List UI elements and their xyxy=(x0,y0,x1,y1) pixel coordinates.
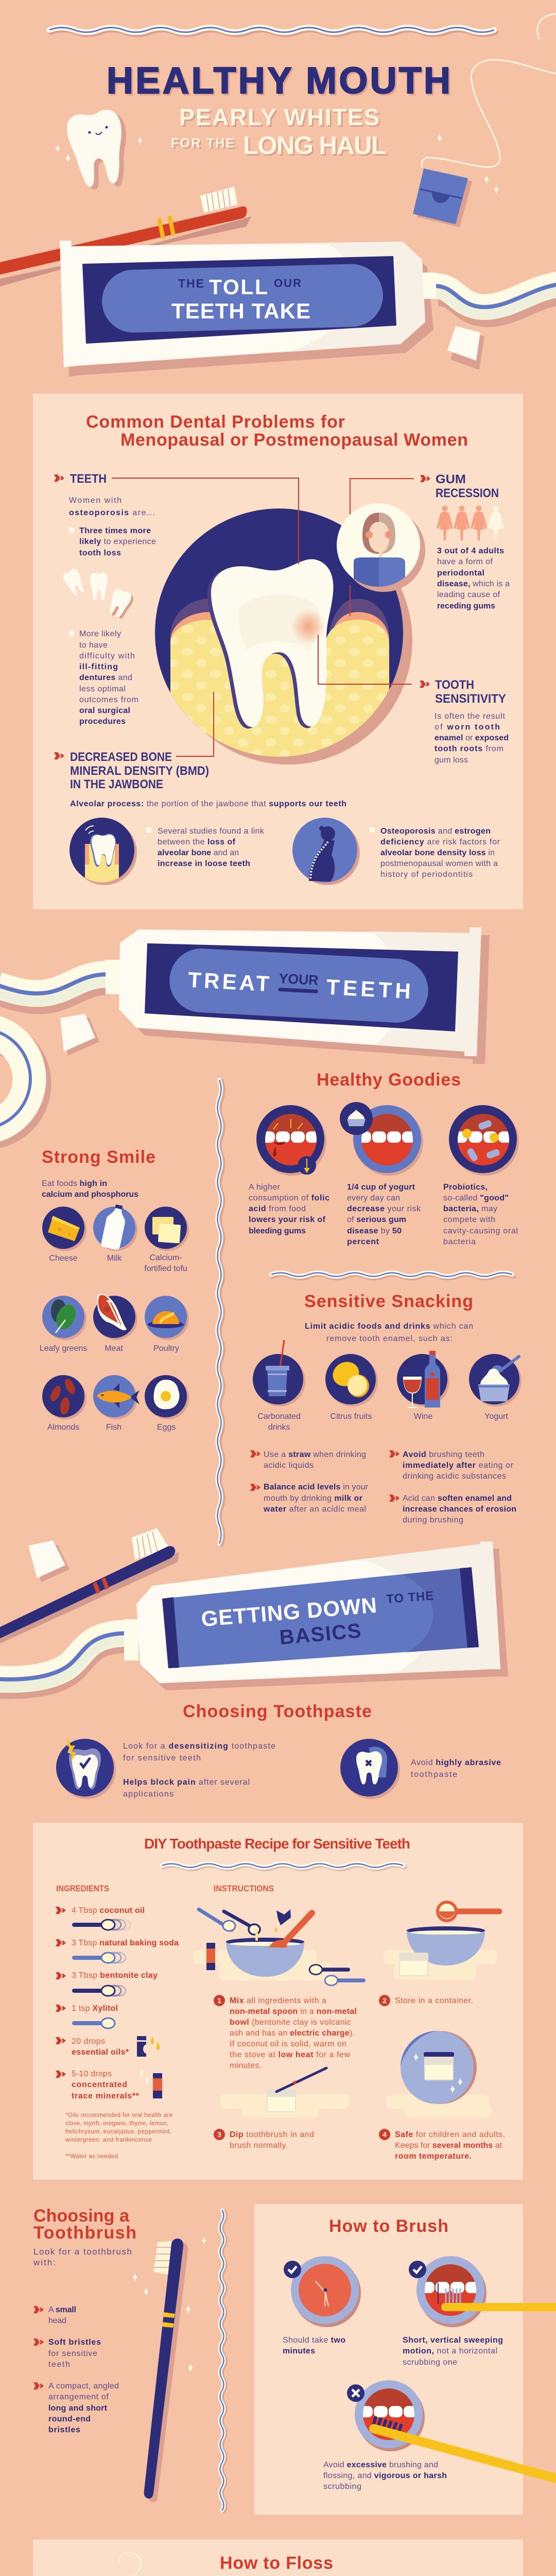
banner text: TEETH xyxy=(326,975,411,1003)
callout: tooth sensitivity: SENSITIVITY xyxy=(435,692,506,706)
text: osteoporosis risk xyxy=(370,827,500,879)
footnotes: clove, myrrh, oregano, thyme, lemon, xyxy=(65,2121,168,2127)
paste strip: toothpaste 2 xyxy=(0,974,110,1001)
footnotes: *Oils recommended for oral health are xyxy=(65,2112,172,2119)
ingredient: xylitol: 1 tsp Xylitol xyxy=(72,2004,118,2013)
sparkles xyxy=(132,2236,206,2372)
text: gum disease stat: leading cause of xyxy=(437,590,500,599)
text: alveolar bone link: increase in loose teeth xyxy=(158,859,250,868)
heading xyxy=(86,412,468,450)
text: yogurt: decrease your risk xyxy=(347,1205,421,1213)
sparkles xyxy=(55,133,499,194)
text: two minutes: minutes xyxy=(283,2347,315,2355)
text: osteoporosis risk: history of periodontitis xyxy=(380,870,473,879)
bullet: acid softens enamel: increase chances of erosion xyxy=(403,1505,516,1514)
text: probiotics: cavity-causing oral xyxy=(443,1227,518,1235)
callout: decreased bone mineral density: DECREASED BONE xyxy=(70,750,172,764)
step 2: 2 xyxy=(383,1996,387,2005)
ingredient: trace minerals: trace minerals** xyxy=(72,2092,140,2100)
bullet: acid softens enamel: Acid can soften enamel and xyxy=(403,1494,512,1503)
text: desensitizing: for sensitive teeth xyxy=(123,1754,201,1762)
heading: Menopausal or Postmenopausal Women xyxy=(120,430,468,450)
intro text: Eat foods high in xyxy=(42,1179,107,1188)
bullet: more likely: ill-fitting xyxy=(79,663,118,671)
callout: decreased bone mineral density: MINERAL DENSITY (BMD) xyxy=(70,764,209,778)
ingredient: essential oils xyxy=(56,2036,160,2057)
icon: smiling tooth xyxy=(65,108,133,192)
snack labels xyxy=(257,1412,508,1432)
title: HEALTHY MOUTH xyxy=(107,60,450,101)
text: osteoporosis risk: Osteoporosis and estrogen xyxy=(380,827,491,836)
step 1: the stove at low heat for a few xyxy=(230,2050,350,2059)
bullet: compact arrangement: round-end xyxy=(48,2415,91,2424)
title: LONG HAUL xyxy=(243,132,387,160)
text: abrasive: toothpaste xyxy=(411,1770,457,1779)
text: desensitizing: Look for a desensitizing toothpaste xyxy=(123,1742,275,1751)
text: avoid excessive: scrubbing xyxy=(323,2482,361,2491)
bullet: small head: A small xyxy=(48,2306,76,2314)
text: two minutes: Should take two xyxy=(283,2336,345,2345)
food labels row 1: Calcium- xyxy=(149,1253,182,1262)
text: avoid excessive xyxy=(323,2461,447,2491)
icon: toothpaste cap xyxy=(447,326,484,370)
ingredient: bentonite clay: 3 Tbsp bentonite clay xyxy=(72,1971,158,1980)
icon: paste ring xyxy=(0,1029,34,1133)
panel: how to floss xyxy=(33,2539,523,2576)
step 1: 1 xyxy=(217,1996,221,2005)
food labels row 2: Leafy greens xyxy=(40,1344,87,1353)
icon: milk xyxy=(93,1203,137,1251)
snack labels: drinks xyxy=(268,1423,290,1432)
callout: teeth: TEETH xyxy=(70,472,107,486)
text: osteoporosis risk: deficiency are risk factors for xyxy=(380,838,500,846)
text: vertical sweeping xyxy=(403,2336,503,2367)
callout: gum recession xyxy=(350,472,499,616)
food labels row 2: Poultry xyxy=(153,1344,179,1353)
text: abrasive xyxy=(411,1758,501,1779)
bullet: balance acid: mouth by drinking milk or xyxy=(264,1494,362,1503)
text: gum disease stat: 3 out of 4 adults xyxy=(437,547,504,555)
text: alveolar bone link xyxy=(146,827,265,868)
step 3: 3 xyxy=(217,2130,221,2139)
text: osteoporosis risk: postmenopausal women with a xyxy=(380,859,498,868)
food labels row 1 xyxy=(49,1253,187,1273)
bullet: soft bristles xyxy=(33,2338,101,2369)
paste strip: toothpaste 1 xyxy=(435,284,556,314)
intro text: Limit acidic foods and drinks which can xyxy=(305,1322,473,1331)
instructions heading: INSTRUCTIONS xyxy=(214,1884,274,1893)
step 3 xyxy=(214,2129,314,2150)
ingredient: baking soda: 3 Tbsp natural baking soda xyxy=(72,1939,179,1947)
footnotes: wintergreen, and frankincense xyxy=(65,2137,152,2143)
intro text: calcium and phosphorus xyxy=(42,1190,138,1199)
icon: floss thread and box xyxy=(413,14,556,227)
bullet: soft bristles: Soft bristles xyxy=(48,2338,101,2347)
text: probiotics xyxy=(443,1183,518,1246)
step 4 xyxy=(379,2129,505,2161)
intro text: with: xyxy=(33,2258,56,2267)
illustration: mixing bowl xyxy=(193,1909,366,1986)
icon: carbonated drink xyxy=(253,1340,305,1406)
heading: Healthy Goodies xyxy=(317,1070,461,1090)
food labels row 3: Eggs xyxy=(157,1423,176,1432)
step 1: ash and has an electric charge). xyxy=(230,2029,355,2038)
text: avoid excessive: Avoid excessive brushing and xyxy=(323,2461,438,2469)
ingredient: trace minerals: concentrated xyxy=(72,2080,127,2089)
banner text: GETTING DOWN xyxy=(200,1593,378,1631)
floss wave divider xyxy=(162,1864,405,1869)
icon: spine circle xyxy=(292,818,360,885)
heading: Common Dental Problems for xyxy=(86,412,345,432)
callout: tooth sensitivity: gum loss xyxy=(435,756,468,765)
callout: teeth xyxy=(54,472,299,564)
title: PEARLY WHITES xyxy=(179,104,379,130)
ingredients list xyxy=(56,1884,179,2160)
text: gum disease stat: periodontal xyxy=(437,569,484,578)
text: probiotics: compete with xyxy=(443,1215,495,1224)
bullet: compact arrangement xyxy=(33,2382,119,2434)
ingredient: trace minerals xyxy=(56,2069,162,2100)
icon: three small teeth xyxy=(61,567,135,621)
bullet: small head xyxy=(33,2306,76,2325)
panel: how to brush xyxy=(254,2204,556,2515)
bullet: avoid brushing: Avoid brushing teeth xyxy=(403,1450,484,1459)
food labels row 2 xyxy=(40,1344,179,1353)
bullet: avoid brushing: drinking acidic substances xyxy=(403,1472,506,1481)
illustration: jar in circle xyxy=(386,2031,492,2117)
text: avoid excessive: flossing, and vigorous or harsh xyxy=(323,2471,447,2480)
floss divider xyxy=(220,2210,225,2512)
heading xyxy=(33,2206,136,2243)
step 4: Keeps for several months at xyxy=(395,2141,502,2150)
panel: DIY toothpaste recipe xyxy=(33,1823,523,2180)
food labels row 2: Meat xyxy=(105,1344,123,1353)
floss divider xyxy=(217,1080,223,1545)
callout: tooth sensitivity: enamel or exposed xyxy=(435,734,509,742)
text: probiotics: Probiotics, xyxy=(443,1183,488,1192)
title: FOR THE xyxy=(171,136,234,150)
paste strip: toothpaste 3 xyxy=(0,1633,128,1686)
step 2 xyxy=(379,1995,473,2006)
bullet: balance acid: water after an acidic meal xyxy=(263,1505,366,1514)
section: choosing a toothbrush xyxy=(33,2206,206,2502)
icon: loose tooth circle xyxy=(70,818,137,885)
icon: yogurt xyxy=(469,1354,522,1406)
bullet: compact arrangement: long and short xyxy=(48,2404,108,2413)
banner text: BASICS xyxy=(279,1619,362,1649)
food labels row 3 xyxy=(47,1423,176,1432)
bullet: small head: head xyxy=(48,2316,66,2325)
text: folic acid: consumption of folic xyxy=(249,1194,329,1202)
bullet: three times more likely: tooth loss xyxy=(79,549,121,557)
ingredient: essential oils: essential oils* xyxy=(72,2048,129,2057)
icon: meat xyxy=(93,1294,137,1340)
icon: proper brushing xyxy=(409,2256,556,2327)
text: probiotics: bacteria xyxy=(443,1238,476,1246)
floss wave divider xyxy=(271,1273,513,1278)
ingredient: bentonite clay xyxy=(56,1971,158,1996)
banner text xyxy=(187,966,411,1003)
step 1 xyxy=(214,1995,357,2070)
heading: DIY Toothpaste Recipe for Sensitive Teeth xyxy=(144,1836,410,1852)
text: gum disease stat: have a form of xyxy=(437,557,493,566)
bullet: three times more likely xyxy=(69,527,156,557)
text: yogurt: 1/4 cup of yogurt xyxy=(347,1183,415,1192)
text: desensitizing: Helps block pain after several xyxy=(123,1778,250,1787)
step 1: bowl (bentonite clay is volcanic xyxy=(230,2018,351,2027)
bullet: more likely: oral surgical xyxy=(79,706,130,715)
bullet: more likely: outcomes from xyxy=(79,696,138,704)
section: strong smile xyxy=(40,1147,189,1432)
step 1: minutes. xyxy=(230,2061,262,2070)
icon: woman portrait xyxy=(337,503,425,592)
icon: red toothbrush xyxy=(0,187,251,286)
bullet: more likely: to have xyxy=(79,641,108,650)
banner text: OUR xyxy=(274,277,301,290)
step 1: non-metal spoon in a non-metal xyxy=(230,2007,357,2016)
ingredient: baking soda xyxy=(56,1939,179,1963)
text: desensitizing: applications xyxy=(123,1790,173,1799)
text: yogurt: percent xyxy=(347,1238,379,1246)
icon: tofu xyxy=(145,1207,189,1251)
bullet: more likely: dentures and xyxy=(79,673,132,682)
callout: tooth sensitivity: of worn tooth xyxy=(435,723,500,732)
text: yogurt: disease by 50 xyxy=(347,1227,402,1235)
intro text: Look for a toothbrush xyxy=(33,2247,132,2257)
step 2: Store in a container. xyxy=(395,1996,473,2005)
text: folic acid: bleeding gums xyxy=(249,1227,306,1235)
panel: toothpaste tube banner Getting Down to the Basics xyxy=(124,1541,508,1690)
ingredients list: INGREDIENTS xyxy=(56,1884,109,1893)
text: two minutes xyxy=(283,2336,345,2355)
intro text: remove tooth enamel, such as: xyxy=(326,1334,453,1343)
icon: floss box xyxy=(70,2553,141,2576)
food labels row 1: Milk xyxy=(107,1254,122,1263)
callout: decreased bone mineral density: IN THE JAWBONE xyxy=(70,777,163,791)
icon: citrus xyxy=(325,1354,378,1406)
bullet: straw: Use a straw when drinking xyxy=(264,1450,366,1459)
icon: navy toothbrush xyxy=(0,1528,179,1643)
food labels row 3: Fish xyxy=(106,1423,121,1432)
banner text: YOUR xyxy=(279,971,319,988)
bullet: avoid brushing xyxy=(389,1450,514,1481)
bullet: more likely: less optimal xyxy=(79,685,126,693)
icon: four women, three highlighted xyxy=(437,506,504,540)
text: probiotics: so-called "good" xyxy=(443,1194,509,1202)
callout: teeth: osteoporosis are... xyxy=(69,509,155,517)
callout: tooth sensitivity: tooth roots from xyxy=(435,744,503,753)
section: healthy goodies xyxy=(249,1070,519,1246)
intro text xyxy=(305,1322,473,1343)
icon: cheese xyxy=(42,1207,86,1251)
text: gum disease stat xyxy=(437,547,510,611)
icon: clock xyxy=(284,2256,361,2327)
icon: toothpaste cap xyxy=(28,1540,70,1582)
callout: tooth sensitivity xyxy=(318,635,509,765)
snack labels: Carbonated xyxy=(257,1412,301,1421)
bullet: straw xyxy=(250,1450,366,1470)
step 4: room temperature. xyxy=(395,2152,472,2161)
icon: abrasive tooth xyxy=(340,1739,400,1799)
ingredient: coconut oil xyxy=(56,1906,145,1930)
step 4: Safe for children and adults. xyxy=(395,2130,505,2139)
ingredient: essential oils: 20 drops xyxy=(72,2037,105,2046)
text: folic acid xyxy=(249,1183,329,1235)
step 3: brush normally. xyxy=(230,2141,288,2150)
panel: common dental problems xyxy=(33,394,523,909)
bullet: soft bristles: for sensitive xyxy=(48,2349,97,2358)
illustration: tooth and jawbone xyxy=(155,509,412,765)
text: yogurt: of serious gum xyxy=(347,1215,406,1224)
banner text: TO THE xyxy=(386,1589,434,1606)
icon: leafy greens xyxy=(42,1296,86,1340)
text: gum disease stat: receding gums xyxy=(437,602,495,611)
text: alveolar bone link: alveolar bone and an xyxy=(158,849,239,857)
callout: tooth sensitivity: TOOTH xyxy=(435,678,474,692)
heading: How to Brush xyxy=(329,2216,448,2236)
icon: desensitizing tooth xyxy=(56,1736,116,1799)
text: folic acid: A higher xyxy=(249,1183,281,1192)
icon: egg xyxy=(145,1375,189,1419)
title xyxy=(107,60,450,160)
snack labels: Wine xyxy=(414,1412,432,1421)
icon: toothpaste cap xyxy=(60,1014,99,1056)
banner text: TEETH TAKE xyxy=(171,299,310,323)
illustration: store in container xyxy=(384,1902,499,1980)
bullet: balance acid: Balance acid levels in your xyxy=(264,1483,369,1492)
heading: How to Floss xyxy=(220,2553,333,2573)
footnotes xyxy=(65,2112,172,2160)
snack labels: Citrus fruits xyxy=(331,1412,372,1421)
text: folic acid: lowers your risk of xyxy=(249,1215,326,1224)
banner text: THE xyxy=(178,277,204,290)
banner text: TOLL xyxy=(209,275,268,299)
bullet: soft bristles: teeth xyxy=(48,2360,70,2369)
callout: decreased bone mineral density xyxy=(54,692,346,808)
ingredient: coconut oil: 4 Tbsp coconut oil xyxy=(72,1906,145,1915)
icon: mouth with folic acid xyxy=(256,1105,326,1176)
text: desensitizing xyxy=(123,1742,275,1799)
icon: harsh brushing xyxy=(347,2380,556,2479)
banner text xyxy=(200,1589,434,1649)
bullet: three times more likely: likely to experience xyxy=(79,537,156,546)
text: probiotics: bacteria, may xyxy=(443,1205,497,1213)
text: vertical sweeping: scrubbing one xyxy=(403,2358,457,2367)
heading: Toothbrush xyxy=(33,2223,136,2243)
food labels row 1: Cheese xyxy=(49,1254,78,1263)
icon: wine xyxy=(397,1351,449,1408)
ingredient: trace minerals: 5-10 drops xyxy=(72,2070,112,2078)
intro text xyxy=(42,1179,138,1199)
callout: tooth sensitivity: Is often the result xyxy=(435,712,506,721)
text: vertical sweeping: motion, not a horizontal xyxy=(403,2347,497,2355)
icon: poultry xyxy=(145,1296,189,1340)
callout: teeth: Women with xyxy=(69,496,121,505)
heading: Choosing a xyxy=(33,2206,130,2226)
icon: fish xyxy=(93,1375,140,1419)
bullet: more likely: procedures xyxy=(79,717,126,726)
text: osteoporosis risk: alveolar bone density loss in xyxy=(380,849,495,857)
footnotes: **Water as needed xyxy=(65,2154,118,2160)
footnotes: helichrysum, eucalyptus, peppermint, xyxy=(65,2129,171,2135)
floss wave divider xyxy=(49,28,496,34)
step 3: Dip toothbrush in and xyxy=(230,2130,314,2139)
step 1: Mix all ingredients with a xyxy=(230,1996,326,2005)
text: gum disease stat: disease, which is a xyxy=(437,580,510,588)
illustration: dip toothbrush xyxy=(220,2068,349,2117)
banner text: TREAT xyxy=(187,968,270,996)
panel: toothpaste tube banner Treat Your Teeth xyxy=(106,927,490,1064)
text: abrasive: Avoid highly abrasive xyxy=(411,1758,501,1767)
text: yogurt: every day can xyxy=(347,1194,400,1202)
icon: upright toothbrush xyxy=(144,2239,188,2502)
ingredient: xylitol xyxy=(56,2004,118,2028)
bullet: more likely xyxy=(69,630,138,726)
step 4: 4 xyxy=(383,2130,387,2139)
text: vertical sweeping: Short, vertical sweeping xyxy=(403,2336,503,2345)
bullet: acid softens enamel: during brushing xyxy=(403,1516,463,1524)
bullet: avoid brushing: immediately after eating or xyxy=(403,1461,514,1470)
callout: gum recession: GUM xyxy=(436,472,466,486)
bullet: compact arrangement: A compact, angled xyxy=(48,2382,119,2391)
heading: Choosing Toothpaste xyxy=(183,1702,372,1721)
bullet: straw: acidic liquids xyxy=(264,1461,314,1470)
panel: toothpaste tube banner The Toll Our Teeth Take xyxy=(60,241,436,377)
bullet: compact arrangement: arrangement of xyxy=(48,2393,109,2401)
callout: gum recession: RECESSION xyxy=(436,486,499,500)
bullet: three times more likely: Three times more xyxy=(79,527,151,535)
heading: Strong Smile xyxy=(42,1147,155,1167)
bullet: compact arrangement: bristles xyxy=(48,2426,80,2434)
bullet: more likely: More likely xyxy=(79,630,121,638)
icon: almonds xyxy=(42,1375,86,1419)
bullet: acid softens enamel xyxy=(389,1494,516,1524)
section: choosing toothpaste xyxy=(56,1702,501,1799)
step 1: If coconut oil is solid, warm on xyxy=(230,2040,346,2048)
bullet: more likely: difficulty with xyxy=(79,652,135,660)
icon: mouth with probiotics xyxy=(449,1105,519,1176)
text: alveolar bone link: Several studies found a link xyxy=(158,827,265,836)
bullet: balance acid xyxy=(250,1483,369,1514)
text: alveolar bone link: between the loss of xyxy=(158,838,236,846)
intro text xyxy=(33,2247,132,2267)
icon: mouth with yogurt xyxy=(340,1102,423,1176)
heading: Sensitive Snacking xyxy=(304,1292,473,1311)
text: folic acid: acid from food xyxy=(249,1205,306,1213)
banner text xyxy=(171,275,310,323)
section: sensitive snacking xyxy=(250,1292,522,1524)
food labels row 3: Almonds xyxy=(47,1423,79,1432)
text: yogurt xyxy=(347,1183,421,1246)
food labels row 1: fortified tofu xyxy=(144,1264,187,1273)
callout: decreased bone mineral density: Alveolar process: the portion of the jawbone that supports our teeth xyxy=(70,800,346,808)
snack labels: Yogurt xyxy=(484,1412,508,1421)
